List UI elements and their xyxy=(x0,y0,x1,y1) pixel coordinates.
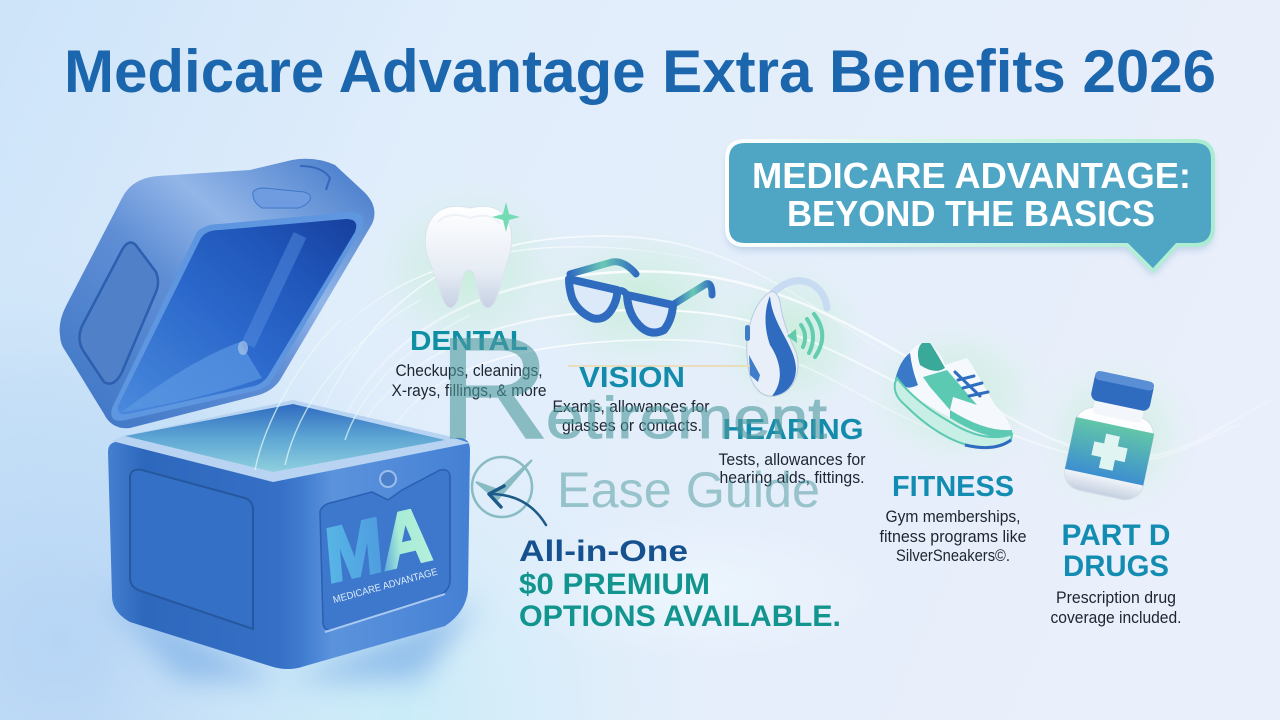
label: vision: Exams, allowances for xyxy=(552,397,710,416)
label: part D drugs: Prescription drug xyxy=(1056,588,1176,607)
label: hearing xyxy=(718,414,866,487)
callout: all-in-one $0 premium: $0 PREMIUM xyxy=(519,568,710,601)
label: hearing: Tests, allowances for xyxy=(718,450,866,469)
label: fitness: fitness programs like xyxy=(880,527,1026,546)
label: fitness: SilverSneakers©. xyxy=(896,546,1010,565)
rising sparkles xyxy=(255,300,470,470)
logo caption: MEDICARE ADVANTAGE xyxy=(332,567,439,606)
callout: all-in-one $0 premium: All-in-One xyxy=(519,535,688,568)
label: dental: DENTAL xyxy=(410,325,528,356)
callout: beyond the basics: BEYOND THE BASICS xyxy=(787,193,1155,234)
icon: glasses xyxy=(569,262,712,333)
box body xyxy=(108,438,470,669)
callout: beyond the basics: MEDICARE ADVANTAGE: xyxy=(752,155,1191,196)
callout: all-in-one $0 premium: OPTIONS AVAILABLE. xyxy=(519,600,841,633)
clasp xyxy=(380,471,396,487)
arrow to box xyxy=(489,486,546,525)
icon: pill bottle xyxy=(1061,368,1165,503)
logo MA: MA xyxy=(322,491,435,600)
icon: tooth xyxy=(425,202,520,308)
label: dental: X-rays, fillings, & more xyxy=(392,381,546,400)
icon: open Medicare Advantage box xyxy=(60,159,480,682)
watermark: Retirement Ease Guide: Ease Guide xyxy=(557,462,820,518)
label: dental: Checkups, cleanings, xyxy=(396,361,542,380)
box opening xyxy=(112,400,470,482)
box lid xyxy=(60,159,374,428)
label: fitness: FITNESS xyxy=(892,471,1014,503)
box left panel xyxy=(130,470,253,629)
label: dental xyxy=(392,325,546,400)
label: vision: glasses or contacts. xyxy=(562,416,702,435)
light glow behind icons xyxy=(365,175,1200,660)
icon: sneaker xyxy=(895,343,1012,448)
watermark: Retirement Ease Guide: etirement xyxy=(546,386,827,451)
flowing light swooshes xyxy=(300,236,1270,470)
box right panel with logo xyxy=(320,470,450,632)
label: part D drugs: PART D xyxy=(1062,519,1170,552)
label: part D drugs: DRUGS xyxy=(1063,550,1169,583)
label: part D drugs: coverage included. xyxy=(1050,608,1182,627)
title: Medicare Advantage Extra Benefits 2026 xyxy=(64,38,1216,105)
label: hearing: HEARING xyxy=(722,414,864,446)
callout: all-in-one $0 premium xyxy=(519,535,841,633)
watermark: Retirement Ease Guide: R xyxy=(438,308,550,469)
label: hearing: hearing aids, fittings. xyxy=(720,468,864,487)
callout: beyond the basics xyxy=(727,141,1213,276)
label: part D drugs xyxy=(1050,519,1182,627)
label: fitness xyxy=(880,471,1026,565)
label: vision: VISION xyxy=(579,362,685,394)
icon: hearing aid xyxy=(745,281,827,396)
label: vision xyxy=(552,362,750,435)
watermark: Retirement Ease Guide xyxy=(438,308,827,518)
box floor shadow xyxy=(100,590,480,682)
label: fitness: Gym memberships, xyxy=(886,507,1020,526)
